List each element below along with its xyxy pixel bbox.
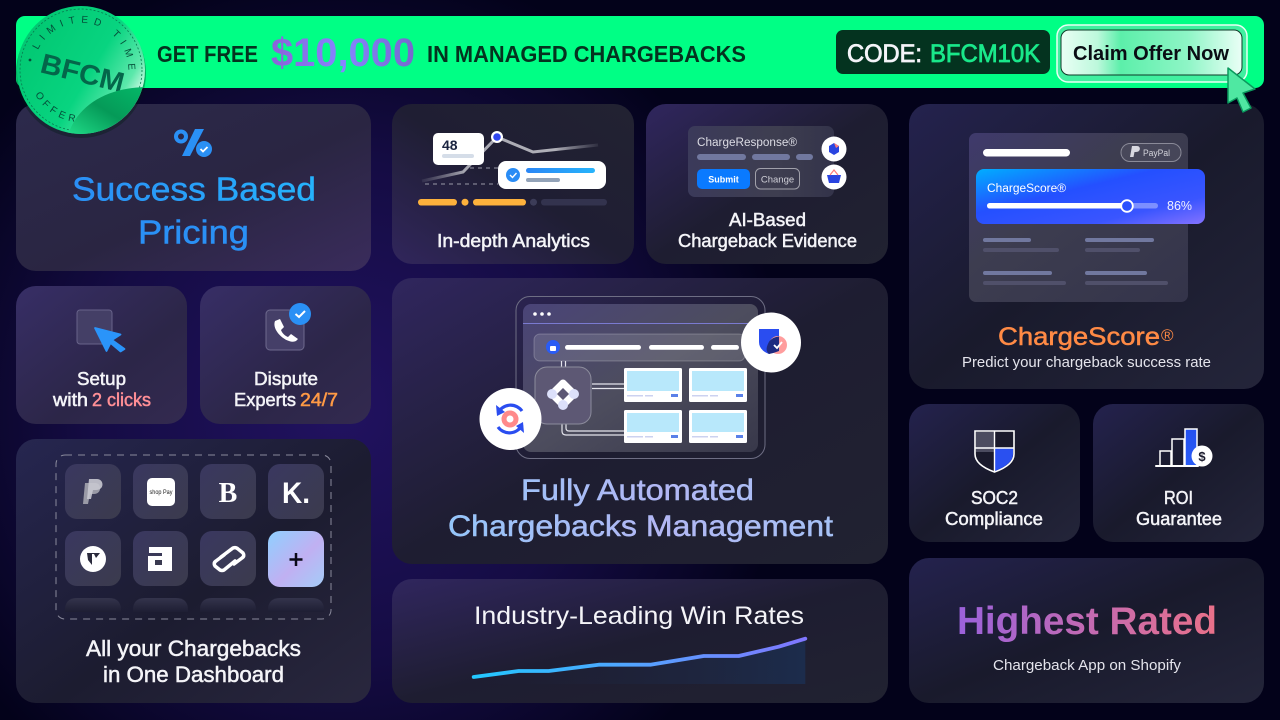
label: soc2 compliance: Compliance — [945, 509, 1043, 529]
icon: roi bars with coin — [1156, 429, 1212, 466]
result card with check — [498, 161, 606, 189]
icon: shield badge — [741, 312, 801, 372]
subtitle: chargeback app on shopify: Chargeback App on Shopify — [993, 658, 1182, 674]
label: setup with 2 clicks — [52, 369, 151, 410]
heading: chargescore: ® — [1161, 326, 1174, 345]
label: ai-based chargeback evidence: Chargeback Evidence — [678, 231, 857, 251]
label: setup with 2 clicks: with — [52, 390, 88, 410]
label: dispute experts 24/7: 24/7 — [300, 390, 338, 410]
paypal pill: PayPal — [1143, 148, 1170, 158]
icon: soc2 shield — [975, 431, 1014, 472]
line chart: win rates — [474, 639, 805, 684]
faded row of tiles — [65, 598, 324, 612]
label: all your chargebacks — [86, 636, 301, 687]
claim offer button — [1057, 25, 1247, 82]
icon: sync gear badge — [480, 388, 542, 450]
change button: Change — [761, 174, 794, 186]
label: soc2 compliance: SOC2 — [971, 488, 1018, 508]
automation dashboard illustration — [480, 296, 801, 458]
panel: soc2 compliance — [909, 404, 1080, 542]
panel: all chargebacks dashboard — [16, 439, 371, 703]
icon: percent with check — [176, 129, 212, 157]
heading: success based pricing — [72, 170, 316, 250]
order cards — [624, 368, 747, 443]
panel: chargescore — [909, 104, 1264, 389]
panel: roi guarantee — [1093, 404, 1264, 542]
logo tile: link mark — [200, 531, 256, 586]
label: dispute experts 24/7: Dispute — [254, 369, 318, 389]
logo tile: b — [200, 464, 256, 519]
logo tile: klarna: K. — [282, 477, 310, 510]
logo tile: shop pay — [133, 464, 188, 519]
placeholder rows — [983, 238, 1168, 285]
logo tile: klarna — [268, 464, 324, 519]
sticker: limited time offer badge: LIMITED TIME — [32, 16, 136, 70]
label: in-depth analytics: In-depth Analytics — [437, 231, 590, 251]
heading: highest rated: Highest Rated — [957, 600, 1217, 643]
stat card 48 — [433, 133, 484, 165]
heading: success based pricing: Success Based — [72, 170, 316, 208]
submit button: Submit — [708, 174, 739, 184]
icon: phone with check — [266, 303, 311, 350]
label: all your chargebacks: All your Chargebacks — [86, 636, 301, 661]
label: setup with 2 clicks: 2 clicks — [92, 390, 151, 410]
sticker: limited time offer badge: BFCM — [38, 48, 128, 98]
icon: click cursor — [77, 310, 124, 352]
panel: setup with 2 clicks — [16, 286, 187, 424]
icon: roi bars with coin: $ — [1198, 449, 1206, 464]
panel: promo banner — [16, 16, 1264, 88]
address bar — [534, 334, 745, 361]
progress bars — [418, 199, 607, 206]
line chart illustration — [418, 131, 607, 206]
sticker: limited time offer badge — [16, 6, 146, 138]
logo tile: a mark — [133, 531, 188, 586]
logo tile: b: B — [219, 478, 237, 509]
score card — [976, 169, 1205, 224]
heading: fully automated chargebacks management: Chargebacks Management — [448, 510, 834, 543]
logo tile: shop pay: shop Pay — [150, 489, 173, 496]
panel: dispute experts — [200, 286, 371, 424]
label: all your chargebacks: in One Dashboard — [103, 662, 284, 687]
label: ai-based chargeback evidence: AI-Based — [729, 210, 806, 230]
chargeresponse card — [688, 126, 834, 197]
claim offer button: Claim Offer Now — [1073, 43, 1229, 65]
heading: fully automated chargebacks management: Fully Automated — [521, 474, 754, 507]
change button — [756, 168, 800, 189]
label: roi guarantee: Guarantee — [1136, 509, 1222, 529]
label: dispute experts 24/7 — [234, 369, 338, 410]
chargescore mock card — [969, 133, 1205, 302]
coupon code pill: CODE: — [847, 40, 922, 68]
amount: $10,000: $10,000 — [271, 31, 415, 75]
icon: green cursor — [1228, 68, 1255, 112]
panel: win rates — [392, 579, 888, 703]
label: setup with 2 clicks: Setup — [77, 369, 126, 389]
panel: fully automated chargebacks — [392, 278, 888, 564]
submit button — [697, 169, 750, 189]
paypal pill — [1121, 144, 1181, 162]
score card: 86% — [1167, 199, 1192, 213]
add more tile — [268, 531, 324, 587]
heading: chargescore: ChargeScore — [998, 323, 1160, 351]
icon: basket badge — [822, 164, 846, 190]
icon: box badge — [822, 136, 846, 162]
label: ai-based chargeback evidence — [678, 210, 857, 251]
integrations grid — [56, 455, 331, 619]
panel: in-depth analytics — [392, 104, 634, 264]
logo tile: paypal — [65, 464, 121, 519]
panel: success based pricing — [16, 104, 371, 271]
label: soc2 compliance — [945, 488, 1043, 529]
panel: ai-based chargeback evidence — [646, 104, 888, 264]
score card: ChargeScore® — [987, 183, 1067, 195]
panel: highest rated — [909, 558, 1264, 703]
logo tile: round mark — [65, 531, 121, 586]
label: dispute experts 24/7: Experts — [234, 390, 296, 410]
coupon code pill: BFCM10K — [930, 40, 1040, 68]
heading: get free: GET FREE — [157, 41, 258, 67]
coupon code pill — [836, 30, 1050, 74]
product logo box — [535, 367, 591, 424]
heading: success based pricing: Pricing — [138, 214, 249, 250]
heading: in managed chargebacks: IN MANAGED CHARGEBACKS — [427, 41, 746, 67]
subtitle: predict success rate: Predict your chargeback success rate — [962, 354, 1211, 371]
heading: industry-leading win rates: Industry-Leading Win Rates — [474, 602, 804, 630]
label: roi guarantee — [1136, 488, 1222, 529]
label: roi guarantee: ROI — [1164, 488, 1193, 508]
heading: fully automated chargebacks management — [448, 474, 834, 543]
sticker: limited time offer badge: OFFER — [36, 92, 75, 122]
stat card 48: 48 — [442, 137, 458, 153]
chargeresponse card: ChargeResponse® — [697, 137, 798, 149]
